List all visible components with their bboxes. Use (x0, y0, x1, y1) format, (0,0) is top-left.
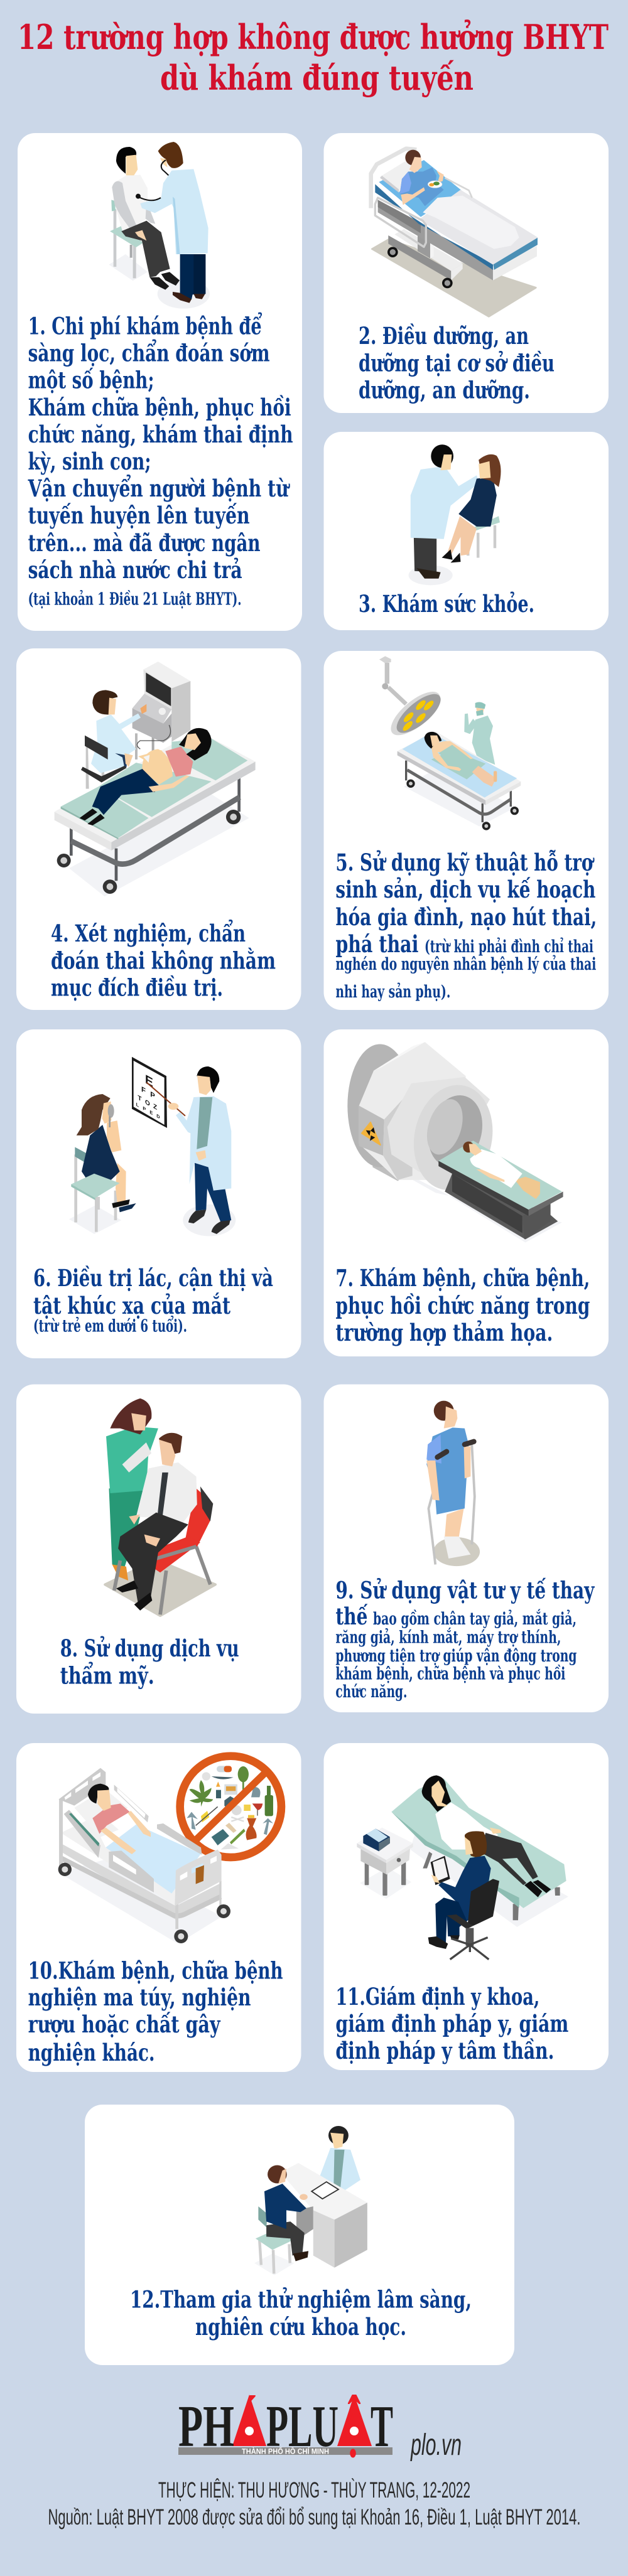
text: item 7: trường hợp thảm họa. (335, 1319, 553, 1346)
text: item 9 (335, 1577, 595, 1702)
title: dù khám đúng tuyến (160, 58, 474, 98)
text: item 4: đoán thai không nhằm (51, 947, 276, 975)
title (18, 17, 609, 98)
text: item 5: nhi hay sản phụ). (335, 982, 450, 1002)
panel 1: screening costs (18, 133, 302, 631)
panel 11: forensic assessments (324, 1743, 609, 2070)
panel 3: health check (324, 432, 609, 630)
eye chart letters (136, 1072, 160, 1120)
panel 4: pregnancy tests (16, 648, 301, 1010)
text: item 10: nghiện khác. (28, 2039, 155, 2066)
text: item 1: sàng lọc, chẩn đoán sớm (28, 340, 270, 367)
text: item 2: 2. Điều dưỡng, an (359, 322, 529, 350)
panel 6: eye treatment (16, 1029, 301, 1358)
icon: ultrasound scan on pregnant patient (55, 662, 256, 896)
eye chart letters: P (143, 1105, 146, 1113)
text: item 1: chức năng, khám thai định (28, 421, 293, 448)
logo: Pháp Luật: PLU (266, 2394, 338, 2459)
eye chart letters: L (136, 1102, 139, 1108)
icon: psychiatrist and patient on couch (357, 1775, 568, 1960)
text: item 1: (tại khoản 1 Điều 21 Luật BHYT). (28, 589, 242, 609)
eye chart letters: D (156, 1113, 160, 1120)
text: item 11: 11.Giám định y khoa, (335, 1983, 539, 2010)
text: item 1: Khám chữa bệnh, phục hồi (28, 394, 291, 421)
text: item 10 (28, 1957, 283, 2066)
logo: Pháp Luật: Á (235, 2394, 264, 2459)
logo: Pháp Luật: Ậ (340, 2394, 369, 2459)
text: item 11 (335, 1983, 568, 2064)
text: item 4: 4. Xét nghiệm, chẩn (51, 920, 246, 947)
text: item 1 (28, 313, 293, 609)
text: item 5 (335, 849, 597, 1002)
icon: man with crutches and leg cast (426, 1401, 480, 1566)
text: item 2: dưỡng, an dưỡng. (359, 377, 530, 404)
text: item 1: 1. Chi phí khám bệnh để (28, 313, 263, 340)
text: item 12: nghiên cứu khoa học. (195, 2313, 406, 2341)
text: item 6: 6. Điều trị lác, cận thị và (33, 1264, 273, 1292)
eye chart letters: T (138, 1094, 142, 1103)
text: item 10: nghiện ma túy, nghiện (28, 1983, 251, 2011)
eye chart letters: F (141, 1085, 146, 1095)
eye chart letters: O (145, 1098, 150, 1108)
panel 5: assisted reproduction (324, 651, 609, 1010)
panel 12: clinical research (85, 2105, 514, 2365)
logo: Pháp Luật: THÀNH PHỐ HỒ CHÍ MINH (242, 2447, 329, 2455)
credits (48, 2478, 580, 2530)
icon: nurse treating man in red chair (105, 1398, 215, 1616)
text: item 9: thế (335, 1602, 368, 1630)
text: item 11: định pháp y tâm thần. (335, 2037, 554, 2064)
text: item 8: thẩm mỹ. (60, 1662, 154, 1690)
text: item 8 (60, 1634, 239, 1690)
logo: Pháp Luật: plo.vn (410, 2428, 462, 2462)
text: item 12 (130, 2286, 472, 2341)
text: item 1: sách nhà nước chi trả (28, 556, 242, 584)
text: item 12: 12.Tham gia thử nghiệm lâm sàng, (130, 2286, 472, 2314)
text: item 9: chức năng. (335, 1682, 407, 1702)
icon: no-drugs sign and hospital bed (58, 1756, 281, 1944)
icon: patient eating in hospital bed (371, 149, 538, 316)
text: item 6: tật khúc xạ của mắt (33, 1292, 230, 1319)
text: item 5: phá thai (335, 930, 418, 958)
eye chart letters: E (145, 1072, 153, 1090)
logo: Pháp Luật: PH (178, 2394, 234, 2459)
eye chart letters: P (150, 1090, 155, 1100)
text: item 1: Vận chuyển người bệnh từ (28, 475, 290, 502)
text: item 1: kỳ, sinh con; (28, 448, 151, 475)
text: item 4: mục đích điều trị. (51, 974, 223, 1002)
logo: Pháp Luật (178, 2394, 462, 2462)
logo: Pháp Luật: T (371, 2394, 393, 2459)
icon: eye test with chart and doctor (69, 1057, 236, 1236)
text: item 10: 10.Khám bệnh, chữa bệnh (28, 1957, 283, 1985)
text: item 1: một số bệnh; (28, 367, 154, 394)
icon: doctor examining woman's throat (409, 444, 501, 585)
text: item 1: tuyến huyện lên tuyến (28, 502, 250, 529)
panel 7: disaster care (324, 1029, 609, 1356)
panel 10: addiction treatment (16, 1743, 301, 2072)
text: item 2: dưỡng tại cơ sở điều (359, 349, 555, 377)
icon: radiation scanner with patient on table (347, 1042, 563, 1243)
panel 2: convalescence (324, 133, 609, 413)
icon: surgeon, lamp and operating table (379, 656, 521, 830)
text: item 7 (335, 1264, 590, 1346)
text: item 3: 3. Khám sức khỏe. (359, 590, 534, 618)
text: item 10: rượu hoặc chất gây (28, 2010, 221, 2038)
icon: doctor and patient at a desk (254, 2126, 367, 2275)
text: item 2 (359, 322, 555, 404)
text: item 6 (33, 1264, 273, 1336)
eye chart letters: E (149, 1109, 153, 1116)
text: item 1: trên... mà đã được ngân (28, 529, 261, 557)
text: item 4 (51, 920, 276, 1002)
text: item 8: 8. Sử dụng dịch vụ (60, 1634, 239, 1662)
eye chart letters: Z (153, 1102, 157, 1112)
icon: doctor examining patient with stethoscope (109, 142, 210, 309)
text: item 6: (trừ trẻ em dưới 6 tuổi). (33, 1315, 187, 1336)
panel 9: medical replacements (324, 1385, 609, 1712)
panel 8: cosmetic services (16, 1385, 301, 1714)
